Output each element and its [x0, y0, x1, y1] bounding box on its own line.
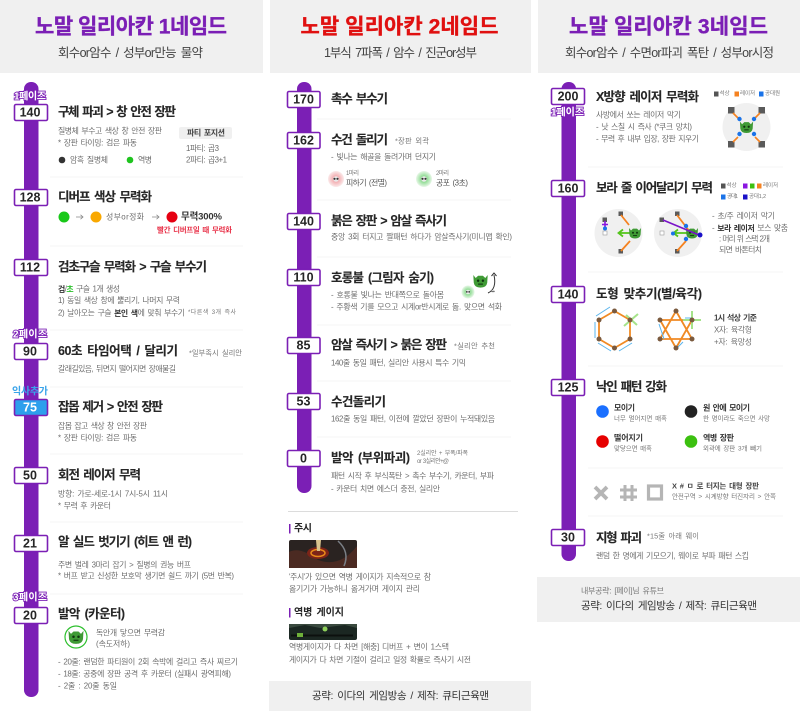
timer 140 — [288, 214, 320, 230]
row 21: 알 실드 벗기기 (히트 앤 런) — [58, 534, 192, 549]
row 30: 지형 파괴 — [596, 530, 642, 545]
timer 128 — [14, 190, 48, 206]
row 50: 회전 레이저 무력 — [58, 467, 141, 482]
phase label: 2페이즈: 2페이즈 — [13, 328, 47, 340]
row 85 — [331, 337, 495, 368]
row 160: - 초/주 레이저 막기 — [712, 210, 775, 220]
timer 0 — [288, 450, 320, 466]
row 30 — [596, 530, 749, 560]
timer 162 — [288, 132, 320, 148]
row 112: *다른색 3개 즉사 — [188, 308, 236, 316]
text: large patterns — [672, 480, 776, 500]
timer 20 — [14, 608, 48, 624]
row 160: 되면 바톤터치 — [719, 244, 762, 254]
timer 53 — [288, 394, 320, 410]
row 85: 140줄 동일 패턴, 실리안 사용시 특수 기믹 — [331, 358, 466, 368]
row 140: 1시 석상 기준 — [714, 312, 758, 322]
timer 140 — [14, 104, 48, 120]
row 140: +자: 육망성 — [714, 336, 752, 346]
row 20: - 18줄: 공중에 장판 공격 후 카운터 (실패시 광역피해) — [58, 668, 231, 678]
row 125: 한 명이라도 죽으면 사망 — [703, 414, 770, 422]
diagram: purple relay 1 — [594, 209, 642, 257]
phase label: 3페이즈: 3페이즈 — [13, 590, 47, 604]
row 200: - 무력 후 내부 입장, 장판 지우기 — [596, 134, 699, 144]
row 170: 촉수 부수기 — [331, 91, 388, 106]
text: large patterns: 안전구역 > 시계방향 터진자리 > 안쪽 — [672, 492, 776, 500]
timer 110: 110 — [293, 270, 314, 284]
subtitle: 1부식 7파폭 / 암수 / 진군or성부 — [324, 46, 477, 60]
subtitle: 회수or암수 / 성부or만능 물약 — [58, 45, 203, 60]
row 21 — [58, 534, 234, 580]
row 110: - 호롱불 빛나는 반대쪽으로 돌아봄 — [331, 290, 444, 300]
timer 160: 160 — [558, 182, 578, 196]
row 125: 모이기 — [614, 402, 635, 412]
timer 50: 50 — [23, 468, 37, 482]
timer 53: 53 — [297, 394, 310, 408]
row 162 — [328, 132, 468, 188]
text: large patterns: X # ㅁ 로 터지는 대형 장판 — [672, 480, 759, 490]
row 112: 검/초 구슬 1개 생성 — [58, 284, 120, 294]
row 90: 갈래길있음, 뒤면지 떨어지면 장애물길 — [58, 364, 176, 374]
footer — [269, 681, 531, 711]
row 200: 사방에서 쏘는 레이저 막기 — [596, 110, 681, 120]
footer: 공략: 이다의 게임방송 / 제작: 큐티근육맨 — [312, 689, 489, 702]
row 85: *실리안 추천 — [454, 342, 495, 350]
row 140 — [58, 104, 232, 164]
panel: 1 네임드 — [0, 0, 263, 697]
legend — [721, 181, 778, 200]
legend: 석상 — [720, 89, 730, 97]
timer 50 — [14, 468, 48, 484]
row 125: 원 안에 모이기 — [703, 402, 750, 412]
legend: 레이저 — [740, 89, 755, 97]
timer 30 — [552, 530, 584, 546]
row 20: - 2줄 : 20줄 동일 — [58, 682, 117, 690]
subtitle: 회수or암수 / 수면or파괴 폭탄 / 성부or시정 — [565, 46, 774, 60]
timer 85: 85 — [297, 338, 310, 352]
timer 75: 75 — [23, 400, 37, 414]
row 128: 성부or정화 — [106, 212, 144, 222]
row 140: 질병체 부수고 색상 창 안전 장판 — [58, 126, 162, 136]
timer 170: 170 — [293, 92, 314, 106]
row 140: 도형 맞추기(별/육각) — [596, 286, 702, 301]
row 75: 잡몹 잡고 색상 창 안전 장판 — [58, 420, 147, 430]
row 200: - 낫 스칠 시 즉사 (*쿠크 망치) — [596, 122, 692, 132]
row 53 — [331, 394, 495, 424]
row 160 — [594, 180, 788, 257]
row 140: 구체 파괴 > 창 안전 장판 — [58, 104, 176, 119]
title: 노말 일리아칸 1네임드 — [35, 16, 227, 38]
row 125: 역병 장판 — [703, 432, 735, 442]
party position chip: 파티 포지션 — [187, 128, 225, 138]
section: 주시 — [289, 522, 431, 594]
row 125: 외곽에 장판 3개 빼기 — [703, 444, 762, 452]
phase label: 1페이즈: 1페이즈 — [551, 106, 584, 118]
row 140 — [595, 286, 758, 351]
row 162: 1마리 — [346, 169, 359, 177]
row 128: 빨간 디버프일 때 무력화 — [157, 224, 232, 234]
row 90 — [58, 343, 242, 374]
section: 역병 게이지: 게이지가 다 차면 기절이 걸리고 일정 확률로 즉사기 시전 — [289, 654, 471, 664]
legend: 공대1,2 — [749, 192, 766, 200]
row 0: 발악 (부위파괴) — [331, 451, 410, 465]
row 85: 암살 즉사기 > 붉은 장판 — [331, 337, 447, 352]
row 90: *일부족시 실리안 — [189, 348, 242, 358]
row 21: * 버프 받고 신성한 보호막 생기면 쉴드 까기 (5번 반복) — [58, 570, 234, 580]
row 20 — [58, 606, 238, 690]
row 112 — [58, 259, 236, 318]
row 162: 공포 (3초) — [436, 178, 468, 188]
diagram: star — [658, 308, 701, 350]
footer: 공략: 이다의 게임방송 / 제작: 큐티근육맨 — [581, 599, 757, 612]
legend: 레이저 — [763, 181, 778, 189]
timer 140: 140 — [558, 288, 578, 302]
party position chip — [179, 127, 232, 139]
label: 익사추가: 익사추가 — [12, 384, 48, 398]
icons: X # square — [595, 485, 662, 501]
title: 노말 일리아칸 2네임드 — [300, 16, 498, 38]
row 30: *15줄 아래 웨이 — [647, 532, 699, 540]
row 50 — [58, 467, 168, 510]
section: 주시: 옮기기가 가능하니 옮겨가며 게이지 관리 — [289, 584, 420, 594]
timer 200: 200 — [558, 90, 578, 104]
row 110: - 주황색 기를 모으고 시계or반시계로 돎. 맞으면 석화 — [331, 302, 502, 312]
row 140: 역병 — [138, 154, 152, 164]
section: 역병 게이지: 역병게이지가 다 차면 [해충] 디버프 + 변이 1스택 — [289, 642, 449, 652]
title: 노말 일리아칸 3네임드 — [569, 16, 768, 38]
row 110 — [331, 270, 502, 312]
icon: green demon — [65, 626, 87, 648]
timer 112: 112 — [20, 260, 40, 274]
row 162: 피하기 (전멸) — [346, 178, 387, 188]
timer 30: 30 — [561, 530, 575, 544]
legend: 공대1 — [727, 192, 738, 200]
diagram: X laser — [722, 103, 770, 151]
row 75: * 장판 타이밍: 검은 파동 — [58, 432, 137, 442]
timer 170 — [288, 92, 320, 108]
row 20: 발악 (카운터) — [58, 606, 125, 621]
row 53: 수건돌리기 — [331, 394, 386, 409]
timer 140 — [552, 286, 584, 302]
diagram: hexagon — [595, 307, 638, 351]
section: 역병 게이지 — [289, 606, 471, 664]
timeline bar — [297, 82, 312, 493]
row 30: 랜덤 한 명에게 기모으기, 웨이로 부파 패턴 스킵 — [596, 550, 749, 560]
row 112: 2) 날아오는 구슬 본인 색에 맞춰 부수기 — [58, 308, 185, 318]
timer 125: 125 — [558, 380, 578, 394]
timer 162: 162 — [293, 134, 314, 148]
row 140: 1파티: 곱3 — [186, 144, 220, 153]
section: 역병 게이지: 역병 게이지 — [294, 606, 344, 618]
row 162: 2마리 — [436, 169, 449, 177]
phase label: 1페이즈: 1페이즈 — [14, 90, 46, 102]
row 75 — [58, 399, 163, 442]
row 50: 방향: 가로-세로-1시 7시-5시 11시 — [58, 488, 168, 498]
row 20: (속도저하) — [96, 638, 130, 648]
timer 85 — [288, 338, 320, 354]
row 53: 162줄 동일 패턴, 이전에 깔았던 장판이 누적돼있음 — [331, 414, 495, 424]
row 140: 붉은 장판 > 암살 즉사기 — [331, 213, 447, 228]
timeline bar — [24, 82, 38, 697]
row 75: 잡몹 제거 > 안전 장판 — [58, 399, 163, 414]
timer 140: 140 — [293, 214, 314, 228]
row 160: - 보라 레이저 보스 맞춤 — [712, 222, 788, 232]
row 128 — [58, 189, 232, 234]
row 0: 2실리안 + 부폭/파폭 — [417, 449, 468, 457]
row 162: - 빛나는 해골을 돌려가며 던지기 — [331, 152, 436, 162]
row 160: : 머리 위 스택 2개 — [719, 234, 770, 244]
row 140: 암흑 질병체 — [70, 154, 108, 164]
row 200 — [596, 89, 780, 151]
row 112: 1) 동일 색상 창에 뿔리기, 나머지 무력 — [58, 295, 180, 305]
footer: 내부공략: [페이]님 유튜브 — [581, 586, 664, 596]
legend — [714, 89, 780, 97]
icon: skull pink — [328, 171, 344, 187]
image: 주시 — [289, 540, 357, 568]
row 0: - 카운터 치면 에스더 충전, 실리안 — [331, 484, 440, 494]
header: 1네임드 — [0, 0, 263, 73]
row 0: or 3실리안+@ — [417, 457, 449, 465]
row 200: X방향 레이저 무력화 — [596, 89, 699, 104]
icon: skull green — [416, 171, 432, 187]
panel: 2 네임드 — [269, 0, 531, 711]
row 162: *장판 외곽 — [395, 136, 429, 146]
footer — [537, 577, 800, 622]
icon: demon and skull circling — [462, 273, 496, 298]
timer 140: 140 — [20, 106, 40, 120]
header: 2네임드 — [270, 0, 531, 73]
row 0 — [331, 449, 495, 494]
row 140: 중앙 3회 터지고 짤패턴 하다가 암살즉사기(미니맵 확인) — [331, 232, 512, 242]
row 160: 보라 줄 이어달리기 무력 — [596, 180, 713, 195]
legend: 석상 — [726, 181, 736, 189]
row 125: 낙인 패턴 강화 — [596, 379, 667, 394]
row 0: 패턴 시작 후 부식폭탄 > 촉수 부수기, 카운터, 부파 — [331, 470, 495, 480]
row 162: 수건 돌리기 — [331, 132, 388, 147]
row 20: 독안개 닿으면 무력감 — [96, 628, 165, 638]
timer 128: 128 — [20, 190, 40, 204]
row 140 — [331, 213, 512, 242]
row 90: 60초 타임어택 / 달리기 — [58, 343, 178, 358]
row 140: X자: 육각형 — [714, 324, 752, 334]
timer 75 — [14, 400, 48, 416]
row 110: 호롱불 (그림자 숨기) — [331, 270, 434, 285]
row 112: 검초구슬 무력화 > 구슬 부수기 — [58, 259, 207, 274]
timer 20: 20 — [23, 608, 37, 622]
section: 주시: 주시 — [294, 522, 312, 534]
timer 21: 21 — [23, 536, 37, 550]
row 128: 디버프 색상 무력화 — [58, 189, 152, 204]
row 125: 맞닿으면 매혹 — [614, 444, 652, 452]
timer 90: 90 — [23, 344, 37, 358]
row 140: 2파티: 곱3+1 — [186, 156, 227, 164]
row 140: * 장판 타이밍: 검은 파동 — [58, 138, 137, 148]
timer 0: 0 — [300, 452, 307, 466]
timer 110 — [288, 270, 320, 286]
timeline bar — [562, 82, 576, 561]
section: 주시: '주시'가 있으면 역병 게이지가 지속적으로 참 — [289, 572, 431, 582]
row 21: 주변 벌레 3마리 잡기 > 질병의 권능 버프 — [58, 560, 191, 570]
timer 200 — [552, 88, 584, 104]
row 125: 너무 멀어지면 매혹 — [614, 414, 667, 422]
row 20: - 20줄: 랜덤한 파티원이 2회 속박에 걸리고 즉사 찌르기 — [58, 656, 238, 666]
timer 112 — [14, 260, 48, 276]
legend: 공대원 — [765, 89, 780, 97]
row 125 — [596, 379, 770, 452]
diagram: purple relay 2 — [654, 209, 702, 257]
timer 90 — [14, 344, 48, 360]
panel: 3 네임드 — [537, 0, 800, 622]
image: 역병 게이지 — [289, 624, 357, 640]
row 125: 떨어지기 — [614, 432, 643, 442]
timer 160 — [552, 180, 584, 196]
row 50: * 무력 후 카운터 — [58, 502, 111, 510]
timer 125 — [552, 380, 584, 396]
row 128: 무력300% — [181, 210, 223, 222]
header: 3네임드 — [538, 0, 800, 73]
timer 21 — [14, 536, 48, 552]
